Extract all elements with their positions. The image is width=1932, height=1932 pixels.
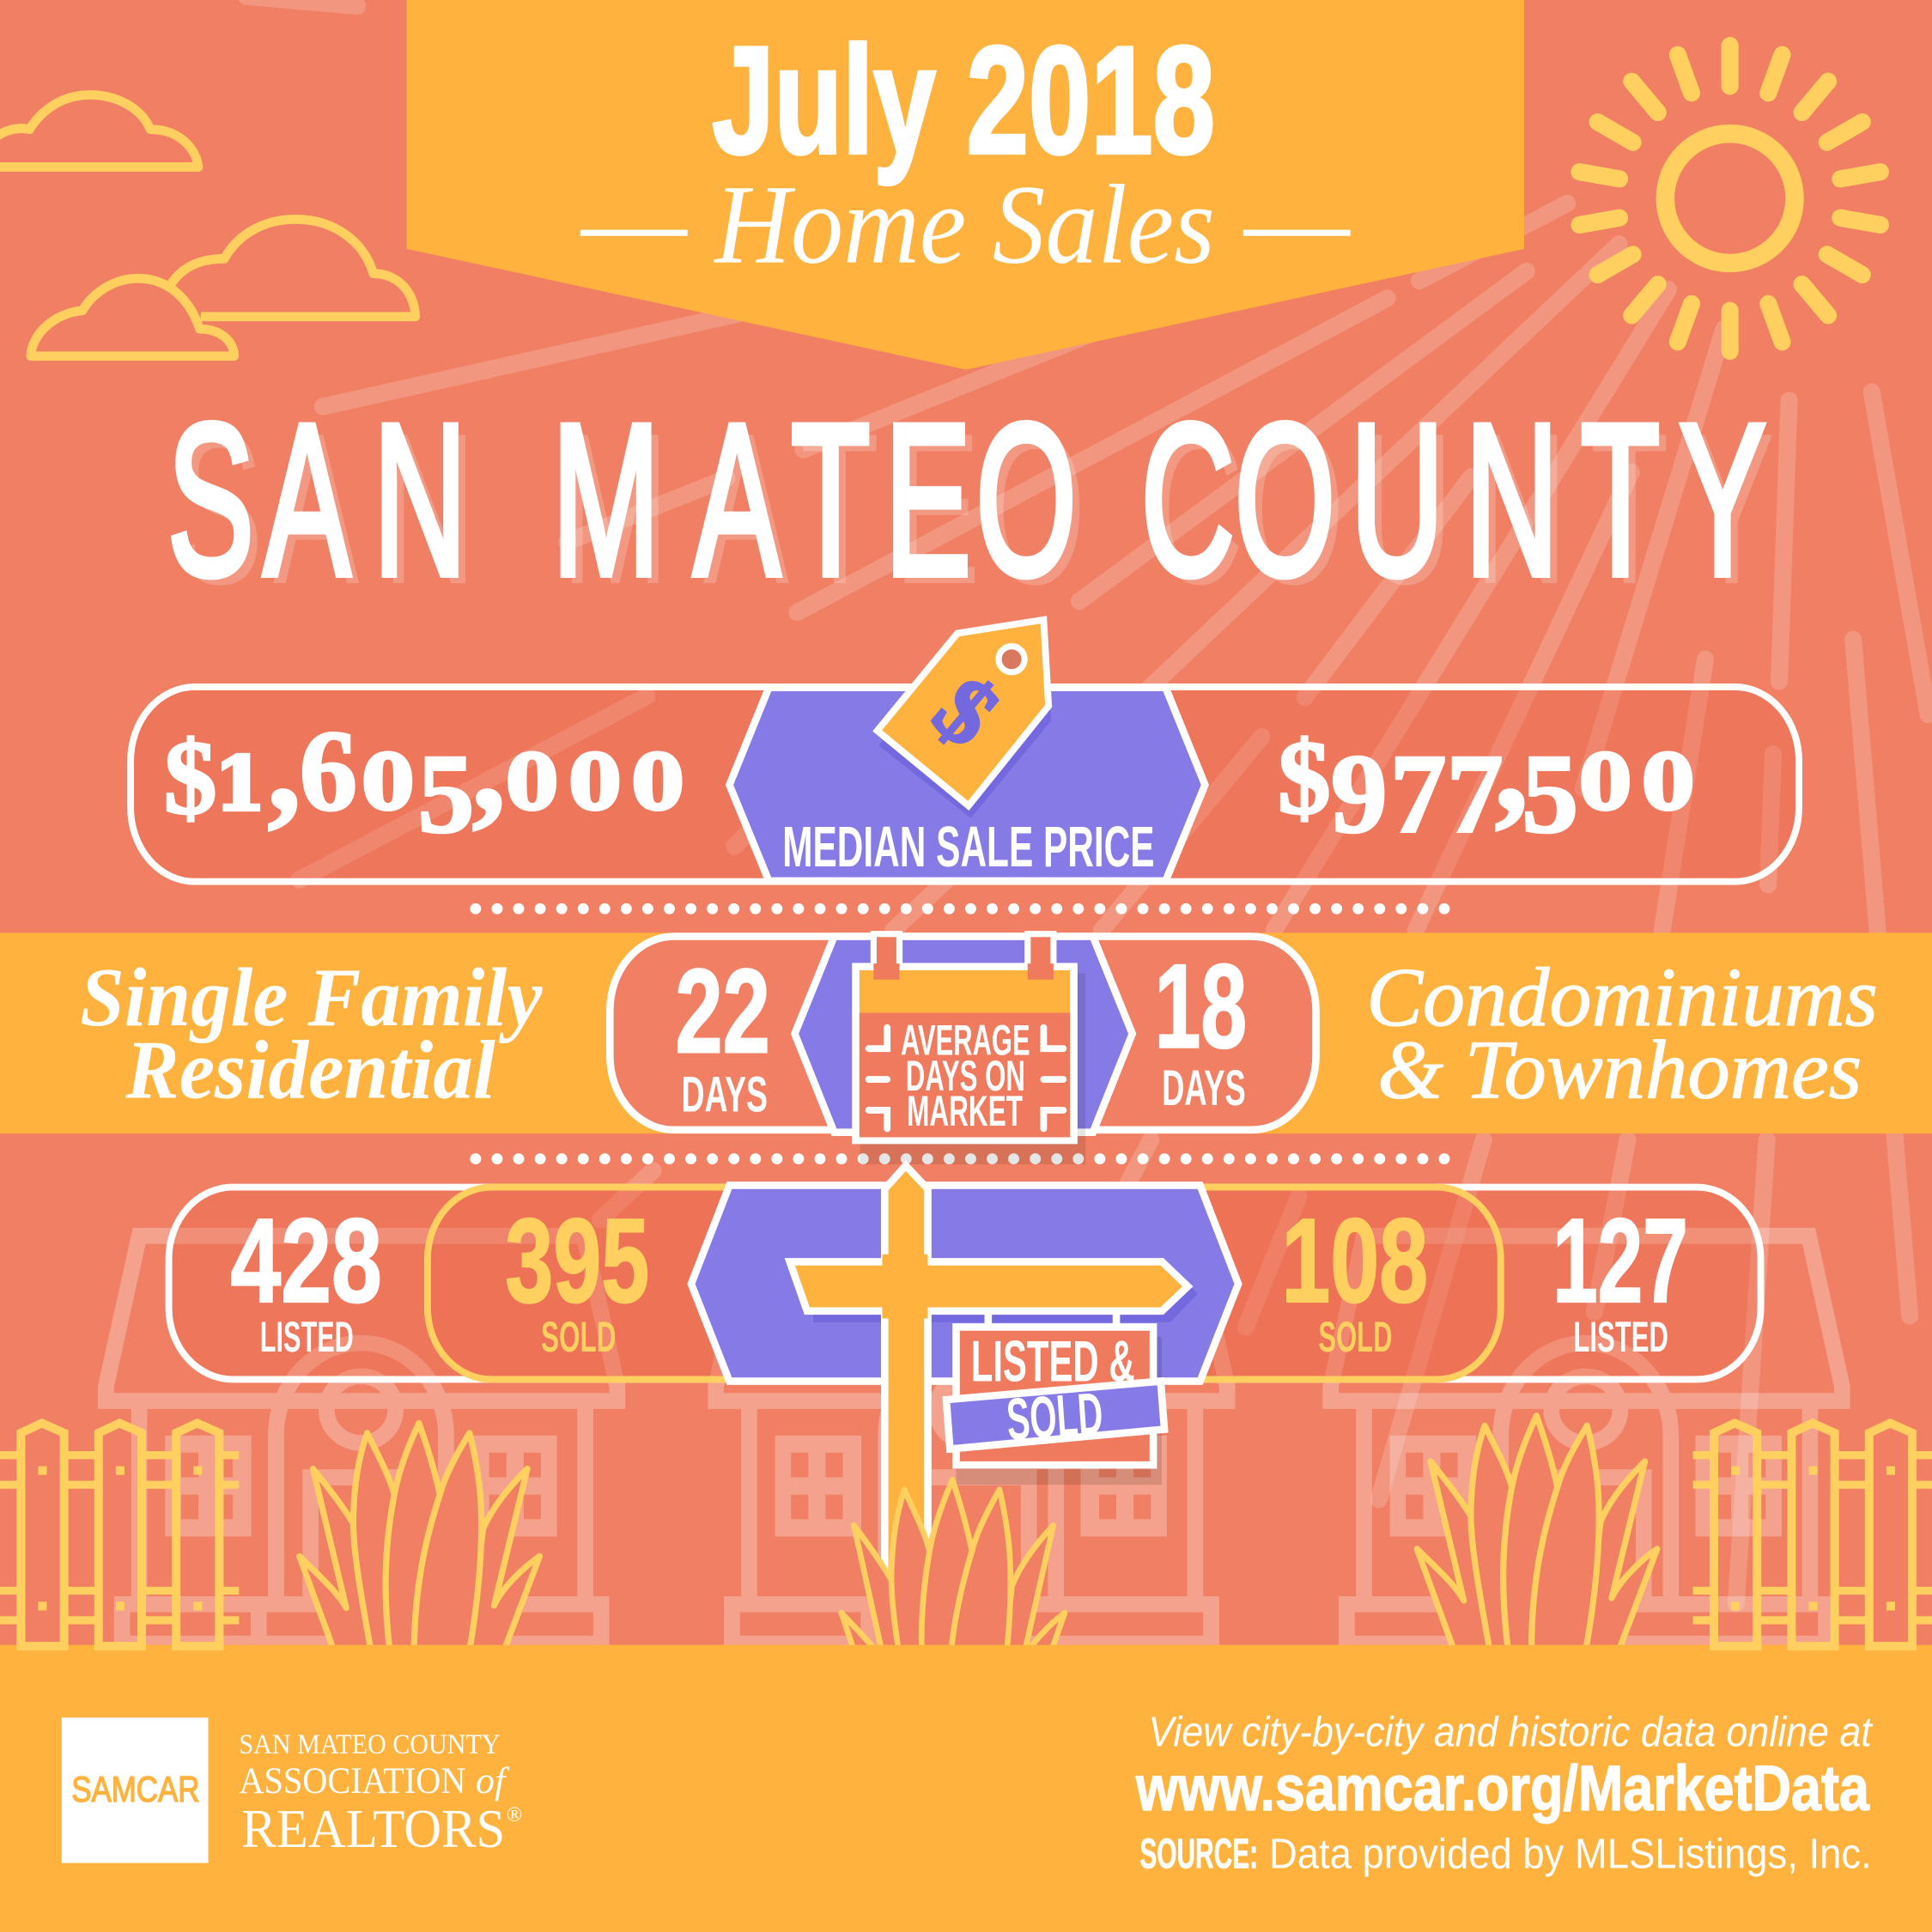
panel: listed and sold: SOLD <box>541 1313 616 1361</box>
inner yellow pill <box>428 1188 1501 1379</box>
single family price: 0 <box>362 739 414 826</box>
panel: median sale price <box>131 687 1799 882</box>
panel: listed and sold <box>169 1185 1761 1382</box>
condo price: 7 <box>1447 731 1504 857</box>
hanging sign: LISTED & <box>971 1330 1135 1394</box>
panel: listed and sold: SOLD <box>1318 1313 1392 1361</box>
association name: REALTORS <box>241 1799 505 1859</box>
icon: price tag <box>878 620 1051 818</box>
icon: calendar <box>856 934 1085 1164</box>
icon: sun <box>1579 46 1880 351</box>
condo days unit: DAYS <box>1162 1060 1246 1116</box>
condo days: 18 <box>1155 940 1247 1073</box>
label: townhomes: & Townhomes <box>1377 1024 1862 1117</box>
association name: of <box>476 1761 510 1801</box>
association name: ® <box>507 1803 522 1826</box>
label: residential: Residential <box>125 1024 495 1117</box>
single family price: , <box>472 690 506 840</box>
listed single family: 428 <box>230 1194 382 1327</box>
condo price: 0 <box>1643 739 1694 826</box>
icon: right fence <box>1693 1423 1932 1646</box>
label: MEDIAN SALE PRICE <box>782 816 1155 879</box>
footer links and source: SOURCE: <box>1139 1831 1258 1877</box>
label: DAYS ON <box>906 1052 1025 1100</box>
purple hexagon <box>729 688 1205 881</box>
condo price: 7 <box>1390 731 1447 857</box>
sun rays background <box>246 0 1929 1603</box>
header banner <box>407 0 1524 369</box>
single family days unit: DAYS <box>682 1066 768 1122</box>
single family price: , <box>267 690 301 840</box>
condo price: 0 <box>1580 739 1631 826</box>
panel: property types band <box>0 933 1932 1133</box>
panel: listed and sold: LISTED <box>1573 1313 1668 1361</box>
condo price: , <box>1495 690 1528 840</box>
panel: listed and sold: LISTED <box>260 1313 354 1361</box>
condo price: $ <box>1278 719 1331 836</box>
hanging sign: SOLD <box>1005 1380 1105 1453</box>
purple hexagon <box>795 937 1133 1133</box>
icon: clouds <box>0 94 416 356</box>
title: county name: SAN MATEO COUNTY <box>177 388 1775 629</box>
subtitle dashes <box>580 231 1351 235</box>
condo price: 5 <box>1522 731 1578 857</box>
condo price: 9 <box>1331 731 1388 857</box>
footer links and source: View city-by-city and historic data online at <box>1148 1709 1874 1755</box>
listed condos: 127 <box>1552 1194 1688 1327</box>
single family price: 0 <box>507 739 558 826</box>
single family price: 5 <box>417 731 474 857</box>
label: AVERAGE <box>901 1016 1030 1064</box>
single family days: 22 <box>675 945 770 1078</box>
association name: SAN MATEO COUNTY <box>239 1729 501 1760</box>
label <box>901 1016 1030 1135</box>
panel: average days on market <box>610 937 1316 1133</box>
label: condominiums: Condominiums <box>1366 951 1878 1044</box>
icon: left fence <box>0 1423 239 1646</box>
footer band <box>0 1645 1932 1932</box>
single family price: $ <box>164 719 217 836</box>
single family price: 0 <box>569 739 621 826</box>
footer links and source: Data provided by MLSListings, Inc. <box>1269 1831 1872 1877</box>
purple hexagon <box>691 1185 1238 1382</box>
single family price: 1 <box>215 741 266 828</box>
sold single family: 395 <box>505 1194 649 1327</box>
hanging sign <box>946 1311 1164 1485</box>
icon: price tag: $ <box>915 657 1018 767</box>
sold condos: 108 <box>1281 1194 1428 1327</box>
plants <box>300 1416 1657 1714</box>
single family price: 6 <box>300 708 357 835</box>
date heading: July 2018 <box>712 15 1215 185</box>
association name: ASSOCIATION <box>239 1761 465 1801</box>
label: MARKET <box>907 1087 1023 1135</box>
dotted divider top <box>476 905 1447 913</box>
footer links and source <box>1135 1709 1874 1877</box>
subtitle: Home Sales <box>713 161 1215 288</box>
logo: SAMCAR: SAMCAR <box>71 1769 199 1809</box>
logo: SAMCAR <box>62 1717 209 1863</box>
association name <box>239 1729 522 1859</box>
title: county name: SAN MATEO COUNTY <box>167 380 1765 620</box>
dotted divider bottom <box>476 1155 1447 1163</box>
calendar tabs <box>873 934 1054 980</box>
label: single family: Single Family <box>80 951 543 1044</box>
icon: for-sale signpost <box>790 1165 1198 1651</box>
outer white pill <box>169 1188 1761 1379</box>
houses background <box>106 1236 1842 1643</box>
single family price: 0 <box>632 739 683 826</box>
